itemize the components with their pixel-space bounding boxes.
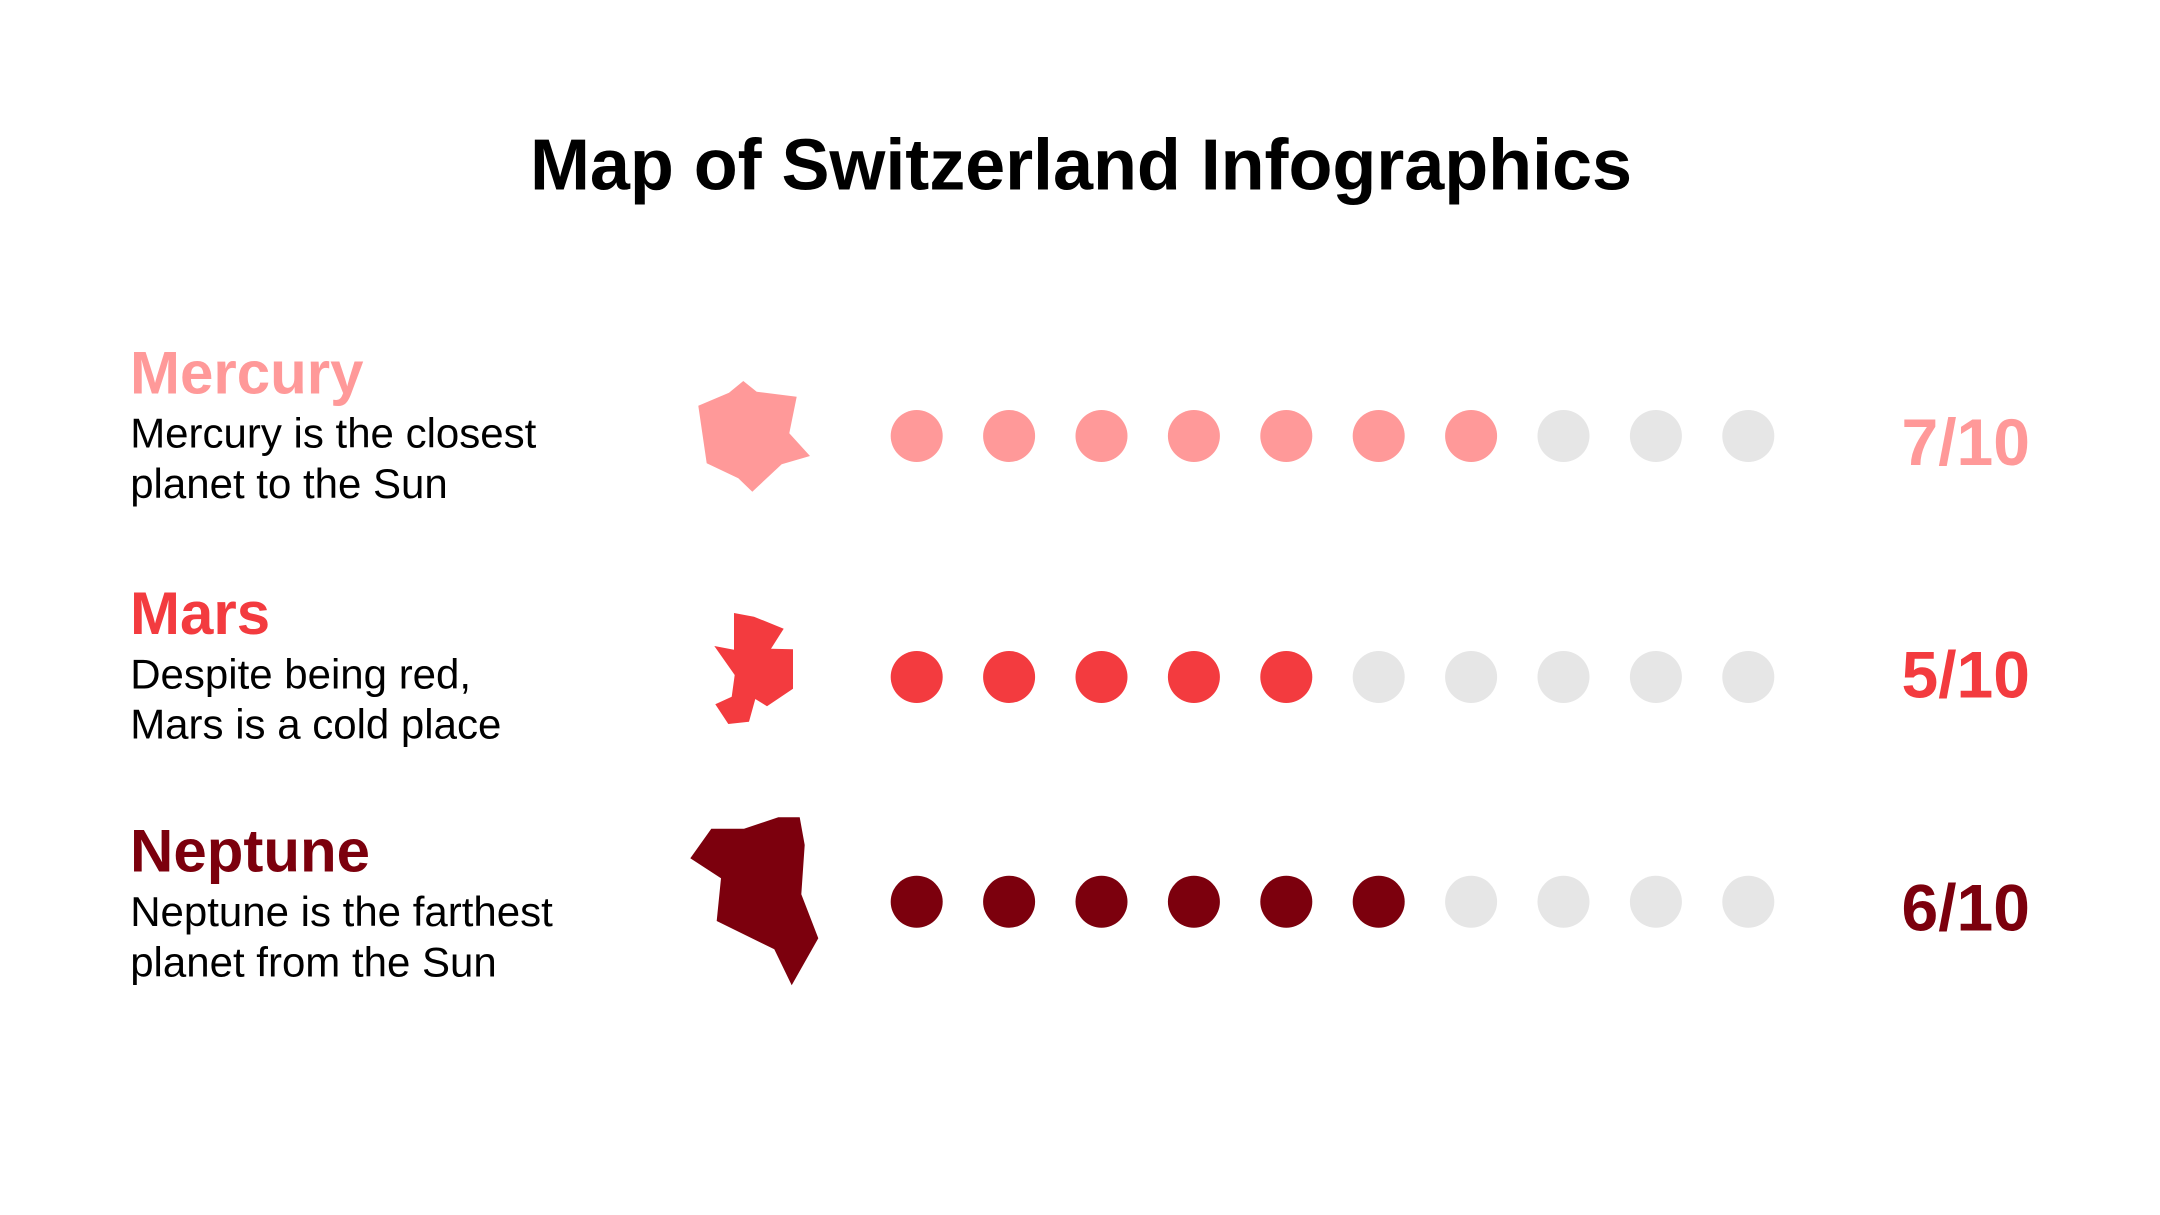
text block: Neptune [130,818,553,986]
description: Mercury: Mercury is the closest [130,410,537,456]
text block: Mercury [130,339,537,507]
description: Mars: Despite being red, [130,650,471,698]
title: Map of Switzerland Infographics [530,125,1632,205]
dot rating: 6 of 10 [891,876,1774,928]
icon: Neptune map shape [690,817,818,985]
description: Mercury: planet to the Sun [130,460,448,507]
description: Neptune: Neptune is the farthest [130,888,553,935]
dot rating: 7 of 10 [891,410,1774,462]
dot rating: 5 of 10 [891,651,1774,703]
panel: Neptune row [130,817,2030,986]
score: Mars: 5/10 [1902,637,2030,711]
panel: Mercury row [130,339,2030,507]
icon: Mars map shape [714,613,793,724]
icon: Mercury map shape [698,381,810,492]
heading: Neptune: Neptune [130,818,370,885]
score: Neptune: 6/10 [1902,870,2030,944]
description: Neptune: planet from the Sun [130,938,497,986]
score: Mercury: 7/10 [1902,405,2030,479]
heading: Mercury: Mercury [130,339,364,406]
description: Mars: Mars is a cold place [130,700,501,748]
text block: Mars [130,580,501,748]
panel: Mars row [130,580,2030,748]
heading: Mars: Mars [130,580,270,647]
